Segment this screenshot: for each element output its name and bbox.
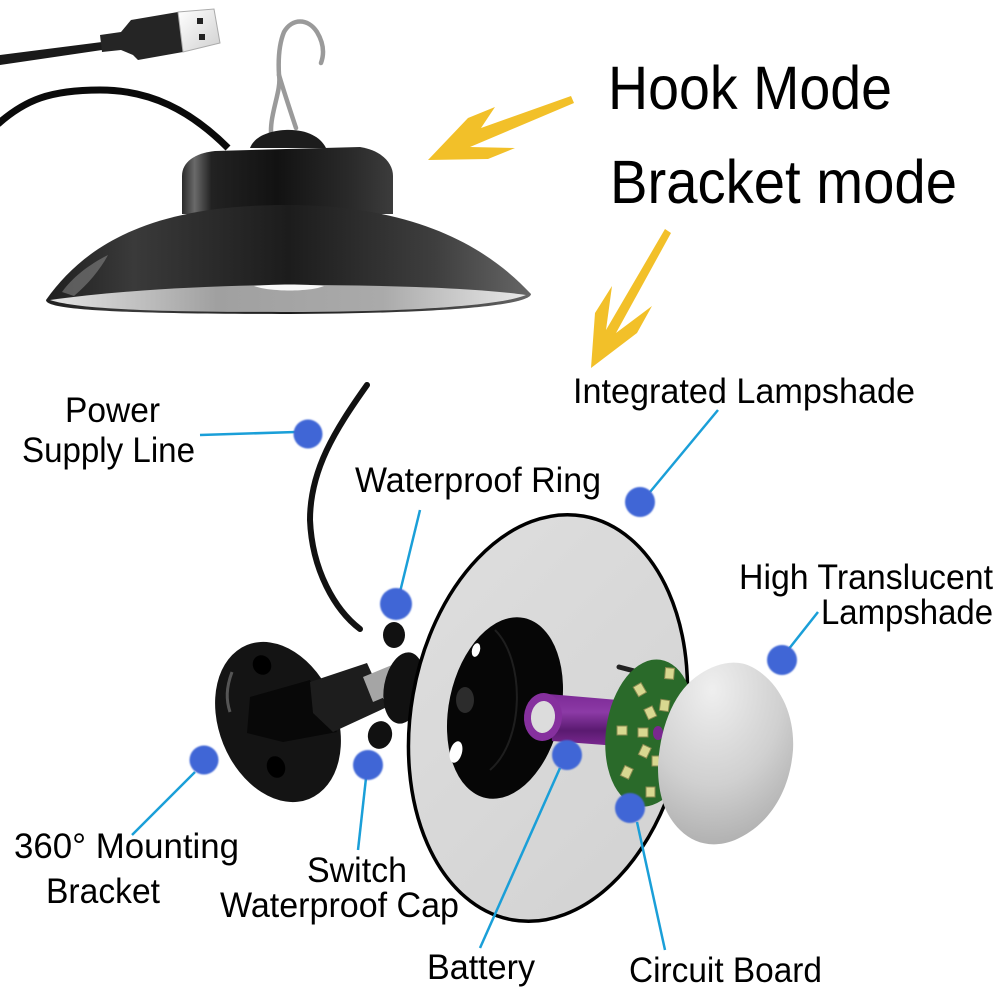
callout dots bbox=[190, 420, 797, 823]
label: power supply line: Power bbox=[65, 391, 160, 430]
label: switch waterproof cap: Switch bbox=[307, 851, 407, 890]
bracket mode arrow bbox=[591, 229, 671, 368]
pin bbox=[619, 667, 642, 673]
hook mode arrow bbox=[428, 96, 574, 160]
label: waterproof ring: Waterproof Ring bbox=[355, 461, 601, 500]
label: high translucent lampshade: High Translucent bbox=[739, 558, 993, 597]
high translucent lampshade dome bbox=[658, 663, 793, 844]
label: 360 mounting bracket: 360° Mounting bbox=[14, 827, 239, 866]
lamp bulb bbox=[254, 284, 324, 290]
title: hook mode: Hook Mode bbox=[608, 54, 892, 122]
integrated lampshade disc bbox=[377, 492, 719, 944]
label: high translucent lampshade bbox=[739, 558, 993, 632]
label: switch waterproof cap bbox=[220, 851, 459, 925]
label: power supply line bbox=[22, 391, 195, 470]
label: switch waterproof cap: Waterproof Cap bbox=[220, 886, 459, 925]
lampshade opening bbox=[431, 606, 579, 810]
hanging lamp product photo bbox=[0, 9, 531, 314]
switch waterproof cap bbox=[365, 718, 395, 752]
exploded view bbox=[192, 385, 793, 944]
label: circuit board: Circuit Board bbox=[629, 951, 822, 990]
label: battery: Battery bbox=[427, 948, 535, 987]
highlight on shade bbox=[62, 255, 108, 296]
leader lines bbox=[132, 410, 818, 950]
label: 360 mounting bracket: Bracket bbox=[46, 872, 160, 911]
label: power supply line: Supply Line bbox=[22, 431, 195, 470]
hook mount bbox=[250, 130, 326, 148]
label: integrated lampshade: Integrated Lampshade bbox=[573, 372, 915, 411]
label: high translucent lampshade: Lampshade bbox=[821, 593, 993, 632]
mounting bracket bbox=[192, 623, 392, 821]
power cable bbox=[0, 90, 228, 148]
title: bracket mode: Bracket mode bbox=[610, 148, 957, 216]
lamp neck bbox=[182, 147, 393, 214]
usb cable bbox=[0, 9, 220, 65]
metal hook bbox=[271, 22, 323, 141]
power supply cable bbox=[310, 385, 367, 629]
lamp shade bbox=[46, 205, 531, 314]
lamp underside bbox=[50, 285, 526, 312]
circuit board bbox=[596, 654, 704, 812]
label: 360 mounting bracket bbox=[14, 827, 239, 911]
rubber cap bbox=[378, 649, 430, 727]
battery bbox=[522, 691, 618, 746]
waterproof ring bbox=[383, 622, 405, 648]
